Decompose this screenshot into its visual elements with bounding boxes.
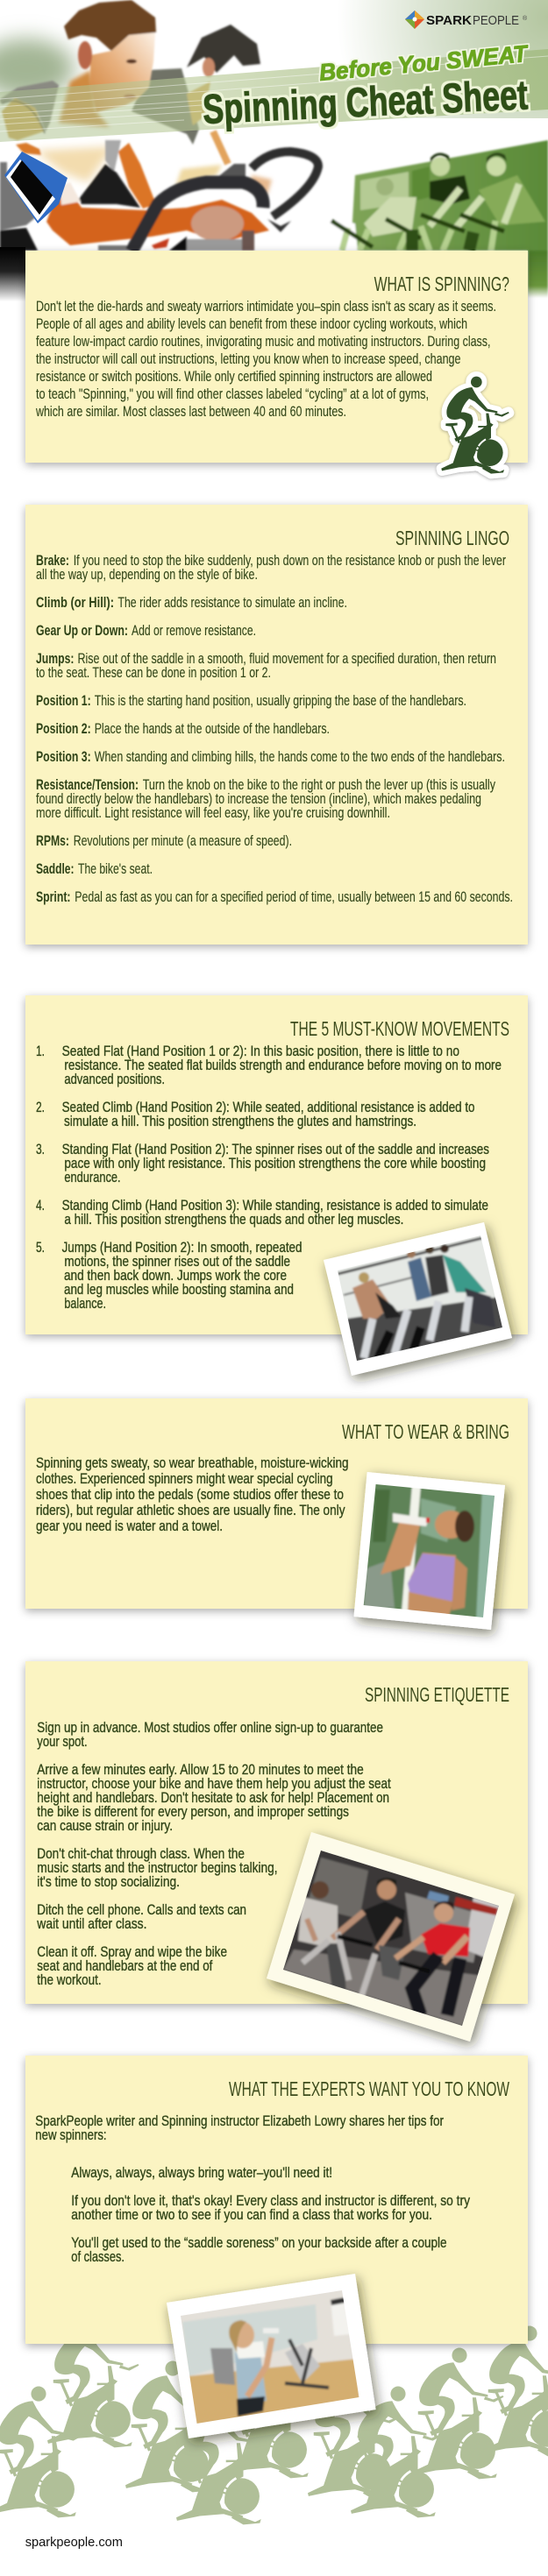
text block: glossary terms: Gear Up or Down: [36, 623, 128, 639]
text block: etiquette rules: height and handlebars. Don't hesitate to ask for help! Placement on [37, 1790, 389, 1806]
numbered list: movements: a hill. This position strengthens the quads and other leg muscles. [64, 1212, 403, 1228]
text block: etiquette rules: it's time to stop socializing. [37, 1874, 180, 1890]
text block: glossary terms: Add or remove resistance. [132, 623, 256, 639]
black shadow at left of first panel [0, 247, 25, 301]
photo: male cyclist behind [132, 25, 272, 195]
text block: glossary terms: Saddle: [36, 861, 74, 877]
text block: etiquette rules: Clean it off. Spray and wipe the bike [37, 1944, 227, 1960]
text block: clothing advice: clothes. Experienced spinners might wear special cycling [36, 1471, 333, 1487]
text block: glossary terms: Resistance/Tension: [36, 777, 139, 793]
text block: etiquette rules: seat and handlebars at the end of [37, 1958, 213, 1974]
text block: clothing advice: gear you need is water and a towel. [36, 1518, 223, 1534]
text block: etiquette rules [36, 1720, 391, 1988]
numbered list: movements: simulate a hill. This position strengthens the glutes and hamstrings. [64, 1114, 416, 1129]
text block: glossary terms: Jumps: [36, 651, 74, 667]
header: photo collage with title [0, 0, 548, 301]
text block: glossary terms: Position 3: [36, 749, 91, 765]
panel: the 5 must-know movements [25, 995, 528, 1334]
text block: glossary terms: The bike's seat. [78, 861, 153, 877]
text block: expert tips: If you don't love it, that's okay! Every class and instructor is different, so try [71, 2193, 471, 2209]
numbered list: movements: 2. [36, 1100, 45, 1115]
text block: glossary terms: Climb (or Hill): [36, 595, 114, 611]
text block: glossary terms: The rider adds resistance to simulate an incline. [117, 595, 347, 611]
text block: expert tips: of classes. [71, 2249, 125, 2265]
numbered list: movements: and leg muscles while boosting stamina and [64, 1282, 294, 1298]
text block: expert intro: SparkPeople writer and Spinning instructor Elizabeth Lowry shares her tips for [35, 2113, 444, 2129]
numbered list: movements: 4. [36, 1198, 45, 1214]
logo: SparkPeople: PEOPLE [473, 13, 519, 28]
text block: expert tips: You'll get used to the “saddle soreness” on your backside after a couple [71, 2235, 447, 2251]
photo: spin class group [324, 1222, 512, 1376]
photo: female cyclist [0, 0, 318, 251]
text block: intro: to teach "Spinning," you will find other classes labeled “cycling” at a lot of gyms, [36, 386, 429, 402]
logo: SparkPeople: ® [523, 15, 528, 22]
panel: spinning lingo [25, 505, 528, 945]
numbered list: movements: balance. [64, 1296, 106, 1312]
text block: expert tips: Always, always, always bring water–you'll need it! [71, 2165, 332, 2181]
text block: etiquette rules: can cause strain or injury. [37, 1818, 173, 1834]
icon: armband phone [4, 152, 68, 223]
numbered list: movements: motions, the spinner rises out of the saddle [64, 1254, 290, 1270]
text block: etiquette rules: wait until after class. [36, 1916, 146, 1932]
logo: SparkPeople [405, 11, 528, 29]
text block: expert intro: new spinners: [35, 2127, 107, 2143]
text block: clothing advice: Spinning gets sweaty, so wear breathable, moisture-wicking [36, 1455, 349, 1471]
text block: intro [35, 299, 496, 420]
text block: expert tips [71, 2165, 471, 2265]
panel: what the experts want you to know [25, 2056, 528, 2344]
photo: green tinted group of cyclists [327, 140, 548, 298]
panel: what is spinning [25, 251, 528, 463]
background tint left [0, 39, 75, 98]
text block: glossary terms: Sprint: [36, 889, 70, 905]
numbered list: movements: 3. [36, 1142, 45, 1157]
text block: expert tips: another time or two to see if you can find a class that works for you. [71, 2207, 432, 2223]
numbered list: movements: advanced positions. [64, 1072, 165, 1087]
text block: glossary terms: to the seat. These can be done in position 1 or 2. [36, 665, 271, 681]
text block: etiquette rules: instructor, choose your bike and have them help you adjust the seat [37, 1776, 391, 1792]
text block: etiquette rules: Sign up in advance. Most studios offer online sign-up to guarantee [37, 1720, 383, 1736]
numbered list: movements: and then back down. Jumps work the core [64, 1268, 287, 1284]
text block: expert intro [35, 2113, 444, 2143]
text block: intro: resistance or switch positions. While only certified spinning instructors are allowed [36, 369, 432, 385]
text block: clothing advice: riders), but regular athletic shoes are usually fine. The only [36, 1503, 345, 1518]
background tint top right [316, 0, 548, 118]
text block: etiquette rules: music starts and the instructor begins talking, [37, 1860, 278, 1876]
icon: cyclist sticker [441, 377, 509, 474]
text block: glossary terms: Position 2: [36, 721, 91, 737]
bottom decorative cyclists silhouettes [0, 2317, 548, 2524]
text block: glossary terms: RPMs: [36, 833, 69, 849]
title: Before You SWEAT: Before You SWEAT [318, 40, 530, 86]
text block: etiquette rules: Arrive a few minutes early. Allow 15 to 20 minutes to meet the [37, 1762, 364, 1778]
text block: etiquette rules: Ditch the cell phone. Calls and texts can [37, 1902, 246, 1918]
numbered list: movements: Jumps (Hand Position 2): In smooth, repeated [62, 1240, 302, 1256]
logo: SparkPeople: SPARK [426, 13, 472, 28]
text block: etiquette rules: the bike is different for every person, and improper settings [37, 1804, 349, 1820]
text block: clothing advice [36, 1455, 349, 1534]
text block: glossary terms: Revolutions per minute (a measure of speed). [74, 833, 292, 849]
text block: glossary terms: Brake: [36, 553, 69, 569]
text block: glossary terms: Position 1: [36, 693, 91, 709]
diagonal speed band [0, 49, 548, 142]
numbered list: movements: 5. [36, 1240, 45, 1256]
photo: woman drinking water [354, 1472, 505, 1630]
numbered list: movements: 1. [36, 1044, 45, 1059]
text block: glossary terms: more difficult. Light resistance will feel easy, like you're cruising downhill. [36, 805, 390, 821]
numbered list: movements [36, 1044, 502, 1312]
text block: glossary terms: all the way up, depending on the style of bike. [36, 567, 258, 583]
text block: etiquette rules: the workout. [37, 1972, 102, 1988]
text block: clothing advice: shoes that clip into the pedals (some studios offer these to [36, 1487, 344, 1503]
numbered list: movements: endurance. [64, 1170, 121, 1185]
text block: etiquette rules: Don't chit-chat through class. When the [37, 1846, 245, 1862]
text block: glossary terms [36, 553, 513, 905]
numbered list: movements: Seated Flat (Hand Position 1 or 2): In this basic position, there is little to no [62, 1044, 459, 1059]
text block: intro: which are similar. Most classes last between 40 and 60 minutes. [35, 404, 346, 420]
photo: three cyclists in a gym [267, 1832, 515, 2042]
panel: spinning etiquette [25, 1661, 528, 2004]
panel: what to wear and bring [25, 1398, 528, 1609]
text block: glossary terms: Place the hands at the outside of the handlebars. [95, 721, 330, 737]
text block: etiquette rules: your spot. [37, 1734, 88, 1750]
footer: sparkpeople.com: sparkpeople.com [25, 2535, 123, 2550]
photo: woman with towel in studio [167, 2274, 376, 2438]
